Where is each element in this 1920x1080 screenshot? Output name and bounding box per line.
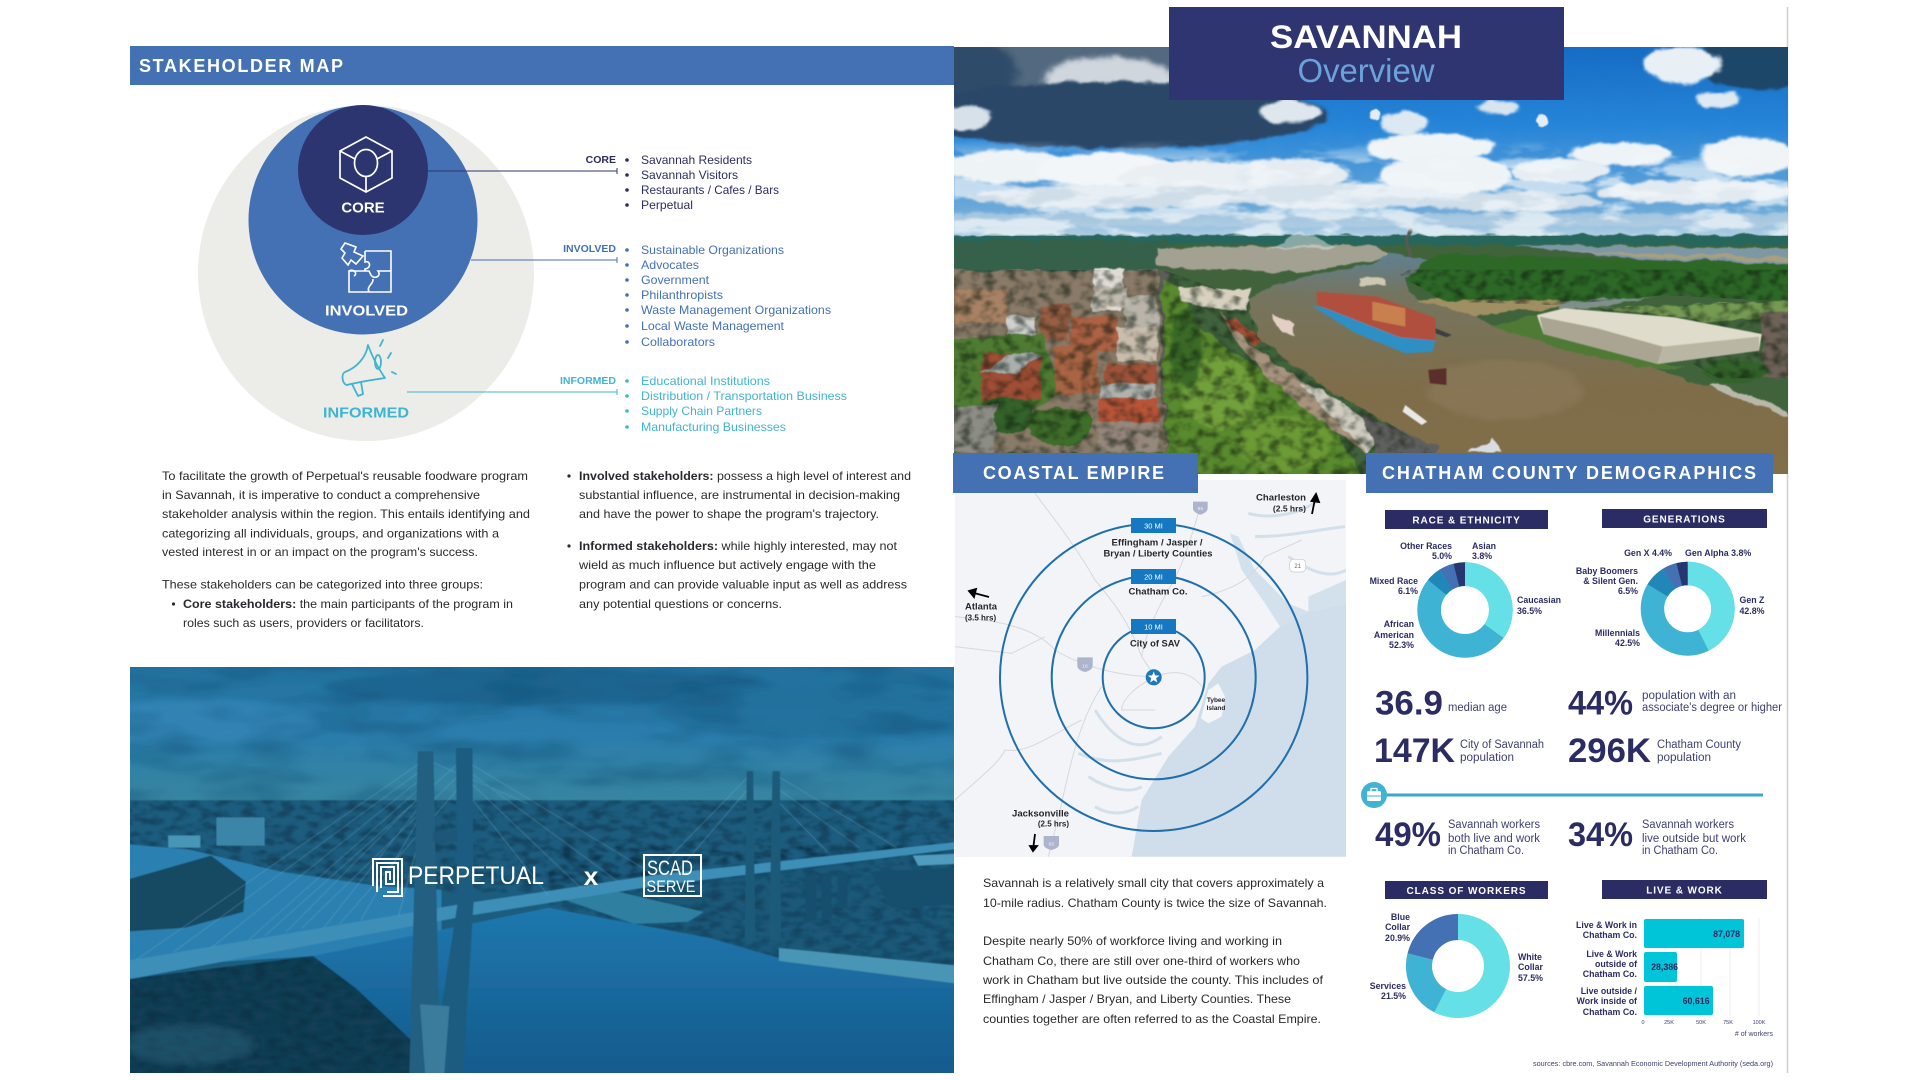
heading: Chatham County Demographics xyxy=(1366,453,1773,493)
text block: stakeholder intro: Core stakeholders: the main participants of the program in xyxy=(183,597,513,611)
generation labels: Baby Boomers xyxy=(1576,566,1638,576)
list: involved stakeholders: Government xyxy=(641,273,710,287)
icon: core hexagon xyxy=(340,137,392,192)
class labels: Services xyxy=(1370,981,1406,991)
bar chart: live and work: Live & Work xyxy=(1586,949,1637,959)
stat: live outside: live outside but work xyxy=(1642,833,1746,845)
class labels: 20.9% xyxy=(1385,933,1410,943)
text block: involved and informed definitions: Involved stakeholders: possess a high level of interest and xyxy=(579,469,911,483)
generation labels: Gen Alpha 3.8% xyxy=(1685,548,1751,558)
stat: live outside: in Chatham Co. xyxy=(1642,845,1718,857)
arrow: Atlanta xyxy=(969,589,989,597)
panel: class of workers xyxy=(1370,881,1548,1005)
text block: involved and informed definitions xyxy=(567,469,911,611)
race labels: Asian xyxy=(1472,541,1496,551)
stat: median age: 36.9 xyxy=(1375,684,1443,722)
text block: involved and informed definitions: and have the power to shape the program's trajectory. xyxy=(579,507,879,521)
arrow: Charleston xyxy=(1312,494,1319,514)
radius rings xyxy=(1000,524,1307,831)
donut chart: class of workers xyxy=(1419,927,1497,1005)
panel: race and ethnicity xyxy=(1370,510,1561,650)
connector: core xyxy=(428,168,617,174)
map labels: (2.5 hrs) xyxy=(1273,504,1306,514)
text block: Savannah size and workforce: Chatham Co, there are still over one-third of workers who xyxy=(983,954,1300,968)
sub-heading: live and work xyxy=(1602,880,1767,899)
text block: involved and informed definitions: substantial influence, are instrumental in decision-making xyxy=(579,488,900,502)
bar chart: live and work: Chatham Co. xyxy=(1583,969,1637,979)
stat: county population xyxy=(1568,732,1741,770)
generation labels xyxy=(1576,548,1765,648)
text block: Savannah size and workforce: work in Chatham but live outside the county. This includes of xyxy=(982,973,1324,987)
class labels xyxy=(1370,912,1544,1001)
icon: city star xyxy=(1146,669,1162,685)
map labels: Effingham / Jasper / xyxy=(1112,538,1203,548)
tag: 30 mi: 30 MI xyxy=(1144,522,1163,530)
race labels: American xyxy=(1374,630,1414,640)
list: informed stakeholders: Manufacturing Businesses xyxy=(641,420,786,434)
tag: 10 mi xyxy=(1131,619,1176,634)
list: involved stakeholders: Advocates xyxy=(641,258,699,272)
icon: informed megaphone xyxy=(343,340,396,396)
race labels: Other Races xyxy=(1400,541,1452,551)
text block: stakeholder intro: categorizing all individuals, groups, and organizations with a xyxy=(162,526,499,540)
diagram: nested stakeholder circles xyxy=(198,105,534,441)
title: Savannah Overview xyxy=(1169,7,1564,100)
photo: Savannah aerial river view xyxy=(954,47,1788,474)
sub-heading: race and ethnicity: RACE & ETHNICITY xyxy=(1412,516,1521,526)
map labels: Tybee xyxy=(1207,697,1226,704)
generation labels: 42.8% xyxy=(1740,606,1765,616)
logo: SCAD Serve xyxy=(644,855,701,896)
sub-heading: generations: GENERATIONS xyxy=(1643,514,1726,526)
sub-heading: class of workers xyxy=(1385,881,1548,899)
map labels: (3.5 hrs) xyxy=(965,614,996,622)
bar chart: live and work: # of workers xyxy=(1735,1031,1773,1038)
heading: Stakeholder Map: STAKEHOLDER MAP xyxy=(139,56,343,76)
generation labels: Gen X 4.4% xyxy=(1624,548,1672,558)
list: involved stakeholders: INVOLVED xyxy=(563,243,616,255)
race labels: 5.0% xyxy=(1432,551,1452,561)
race labels: 3.8% xyxy=(1472,551,1492,561)
stat: degree attainment: associate's degree or higher xyxy=(1642,702,1782,714)
bar chart: live and work: 0 xyxy=(1641,1020,1645,1026)
list: involved stakeholders xyxy=(563,243,831,349)
stat: degree attainment: population with an xyxy=(1642,690,1736,702)
class labels: Collar xyxy=(1518,962,1544,972)
tag: 30 mi xyxy=(1131,518,1176,533)
list: core stakeholders xyxy=(586,153,779,212)
text block: involved and informed definitions: any potential questions or concerns. xyxy=(579,597,782,611)
list: core stakeholders: Savannah Residents xyxy=(641,153,752,167)
text block: Savannah size and workforce: Despite nearly 50% of workforce living and working in xyxy=(983,934,1282,948)
label: informed: INFORMED xyxy=(323,404,409,422)
list: core stakeholders: Perpetual xyxy=(641,198,693,212)
icon: involved puzzle xyxy=(341,243,391,292)
tag: 20 mi: 20 MI xyxy=(1144,572,1163,582)
class labels: 21.5% xyxy=(1381,991,1406,1001)
panel: generations xyxy=(1576,509,1767,648)
panel: live and work xyxy=(1576,880,1773,1038)
class labels: Blue xyxy=(1391,912,1410,922)
bar chart: live and work: 100K xyxy=(1753,1020,1766,1026)
text block: Savannah size and workforce: 10-mile radius. Chatham County is twice the size of Savannah. xyxy=(983,896,1327,910)
text block: involved and informed definitions: Informed stakeholders: while highly interested, may not xyxy=(579,539,898,553)
text block: Savannah size and workforce: Savannah is a relatively small city that covers approximately a xyxy=(983,876,1324,890)
heading: Coastal Empire xyxy=(953,453,1198,493)
list: core stakeholders: Savannah Visitors xyxy=(641,168,738,182)
icon: highway shields xyxy=(1044,502,1306,850)
list: involved stakeholders: Local Waste Management xyxy=(641,319,785,333)
logo: SCAD Serve: SERVE xyxy=(646,877,696,896)
donut chart: generations xyxy=(1652,573,1723,644)
list: informed stakeholders: INFORMED xyxy=(560,375,616,387)
bar chart: live and work: 50K xyxy=(1696,1020,1706,1026)
race labels: Mixed Race xyxy=(1370,576,1418,586)
icon: highway shields: 95 xyxy=(1198,506,1203,512)
text block: involved and informed definitions: wield as much influence but actively engage with the xyxy=(578,558,876,572)
bar chart: live and work xyxy=(1576,918,1773,1038)
donut chart: race xyxy=(1429,574,1501,646)
text block: Savannah size and workforce: Effingham / Jasper / Bryan, and Liberty Counties. These xyxy=(983,992,1291,1006)
stat: city population xyxy=(1374,732,1544,770)
bar chart: live and work: 87,078 xyxy=(1713,929,1740,939)
list: involved stakeholders: Sustainable Organizations xyxy=(641,243,784,257)
text block: stakeholder intro xyxy=(162,469,530,630)
list: involved stakeholders: Philanthropists xyxy=(641,288,723,302)
map labels: Charleston xyxy=(1256,492,1306,504)
arrow: Jacksonville xyxy=(1030,834,1037,851)
title: Savannah Overview: SAVANNAH xyxy=(1270,19,1462,55)
title: Savannah Overview: Overview xyxy=(1298,52,1435,89)
sub-heading: live and work: LIVE & WORK xyxy=(1646,886,1723,896)
bar chart: live and work: Work inside of xyxy=(1577,996,1637,1006)
bar chart: live and work: outside of xyxy=(1595,959,1637,969)
bar chart: live and work: 25K xyxy=(1664,1020,1674,1026)
race labels: Caucasian xyxy=(1517,595,1561,605)
stat: live outside xyxy=(1568,816,1746,857)
text block: Savannah size and workforce: counties together are often referred to as the Coastal Empire. xyxy=(983,1012,1321,1026)
stat: live and work: in Chatham Co. xyxy=(1448,845,1524,857)
stat: city population: 147K xyxy=(1374,732,1455,770)
stat: county population: population xyxy=(1657,752,1711,764)
generation labels: Gen Z xyxy=(1740,595,1765,605)
sub-heading: class of workers: CLASS OF WORKERS xyxy=(1407,886,1526,897)
sub-heading: race and ethnicity xyxy=(1385,510,1548,529)
generation labels: 6.5% xyxy=(1618,586,1638,596)
stat: live and work: both live and work xyxy=(1448,833,1540,845)
text: x between logos: x xyxy=(584,861,599,891)
race labels xyxy=(1370,541,1561,650)
tag: 20 mi xyxy=(1131,569,1176,584)
list: informed stakeholders: Distribution / Transportation Business xyxy=(641,389,847,403)
stat: live and work xyxy=(1375,816,1540,857)
stat: live outside: Savannah workers xyxy=(1642,819,1734,831)
text block: stakeholder intro: To facilitate the growth of Perpetual's reusable foodware program xyxy=(162,469,528,483)
map labels: Island xyxy=(1207,705,1225,712)
stat: median age xyxy=(1375,684,1507,722)
stat: county population: Chatham County xyxy=(1657,739,1741,751)
icon: highway shields: 95 xyxy=(1049,841,1054,847)
generation labels: & Silent Gen. xyxy=(1583,576,1638,586)
map labels: (2.5 hrs) xyxy=(1038,820,1069,828)
map labels: Bryan / Liberty Counties xyxy=(1104,548,1212,560)
photo: blue-toned Talmadge bridge xyxy=(130,667,954,1073)
class labels: White xyxy=(1518,952,1542,962)
map: Coastal Empire radius map xyxy=(955,480,1346,857)
stat: live and work: Savannah workers xyxy=(1448,819,1540,831)
list: informed stakeholders: Supply Chain Partners xyxy=(641,404,762,418)
bar chart: live and work: Live outside / xyxy=(1581,986,1638,996)
map labels: Jacksonville xyxy=(1012,808,1069,820)
list: involved stakeholders: Waste Management Organizations xyxy=(641,303,831,317)
text block: stakeholder intro: vested interest in or an impact on the program's success. xyxy=(162,545,478,559)
logo: Perpetual xyxy=(373,859,544,896)
bar chart: live and work: Chatham Co. xyxy=(1583,930,1637,940)
bar chart: live and work: 28,386 xyxy=(1651,962,1678,972)
generation labels: Millennials xyxy=(1595,628,1640,638)
icon: highway shields: 16 xyxy=(1082,663,1088,669)
class labels: Collar xyxy=(1385,922,1411,932)
icon: highway shields: 21 xyxy=(1294,564,1302,570)
stat: degree attainment xyxy=(1568,684,1782,722)
map labels: Atlanta xyxy=(965,602,998,612)
logo: SCAD Serve: SCAD xyxy=(647,857,693,880)
stat: county population: 296K xyxy=(1568,732,1651,770)
list: informed stakeholders xyxy=(560,374,847,434)
text block: stakeholder intro: in Savannah, it is imperative to conduct a comprehensive xyxy=(162,488,480,502)
heading: Coastal Empire: COASTAL EMPIRE xyxy=(983,463,1164,483)
list: core stakeholders: CORE xyxy=(586,154,616,166)
bar chart: live and work: Chatham Co. xyxy=(1583,1007,1637,1017)
stat: median age: median age xyxy=(1448,702,1507,714)
text block: Savannah size and workforce xyxy=(982,876,1327,1026)
connector: involved xyxy=(471,257,617,263)
list: involved stakeholders: Collaborators xyxy=(641,335,715,349)
logo: Perpetual: PERPETUAL xyxy=(408,862,544,890)
heading: Chatham County Demographics: CHATHAM COUNTY DEMOGRAPHICS xyxy=(1382,463,1756,483)
stat: live and work: 49% xyxy=(1375,816,1441,854)
bar chart: live and work: 60,616 xyxy=(1683,996,1710,1006)
race labels: 52.3% xyxy=(1389,640,1414,650)
label: core: CORE xyxy=(341,200,385,216)
connector: informed xyxy=(407,389,617,395)
label: involved: INVOLVED xyxy=(325,302,408,320)
map labels: City of SAV xyxy=(1130,638,1181,650)
bar chart: live and work: 75K xyxy=(1723,1020,1733,1026)
stat: degree attainment: 44% xyxy=(1568,684,1633,722)
race labels: African xyxy=(1384,619,1414,629)
map labels: Chatham Co. xyxy=(1128,586,1188,598)
bar chart: live and work: Live & Work in xyxy=(1576,920,1637,930)
map labels xyxy=(965,492,1306,828)
sources note: sources: cbre.com, Savannah Economic Development Authority (seda.org) xyxy=(1533,1059,1773,1068)
list: informed stakeholders: Educational Institutions xyxy=(641,374,770,388)
divider with briefcase icon xyxy=(1361,782,1763,808)
race labels: 36.5% xyxy=(1517,606,1542,616)
icon: Perpetual mark xyxy=(373,859,402,896)
heading: Stakeholder Map xyxy=(130,46,954,85)
text block: stakeholder intro: These stakeholders can be categorized into three groups: xyxy=(162,578,483,592)
race labels: 6.1% xyxy=(1398,586,1418,596)
text block: stakeholder intro: roles such as users, providers or facilitators. xyxy=(183,616,424,630)
stat: live outside: 34% xyxy=(1568,816,1633,854)
list: core stakeholders: Restaurants / Cafes / Bars xyxy=(641,183,779,197)
text block: stakeholder intro: stakeholder analysis within the region. This entails identifying and xyxy=(162,507,530,521)
text block: involved and informed definitions: program and can provide valuable input as well as address xyxy=(579,578,907,592)
class labels: 57.5% xyxy=(1518,973,1543,983)
tag: 10 mi: 10 MI xyxy=(1144,622,1163,632)
stat: city population: City of Savannah xyxy=(1460,739,1544,751)
stat: city population: population xyxy=(1460,752,1514,764)
generation labels: 42.5% xyxy=(1615,638,1640,648)
sub-heading: generations xyxy=(1602,509,1767,528)
